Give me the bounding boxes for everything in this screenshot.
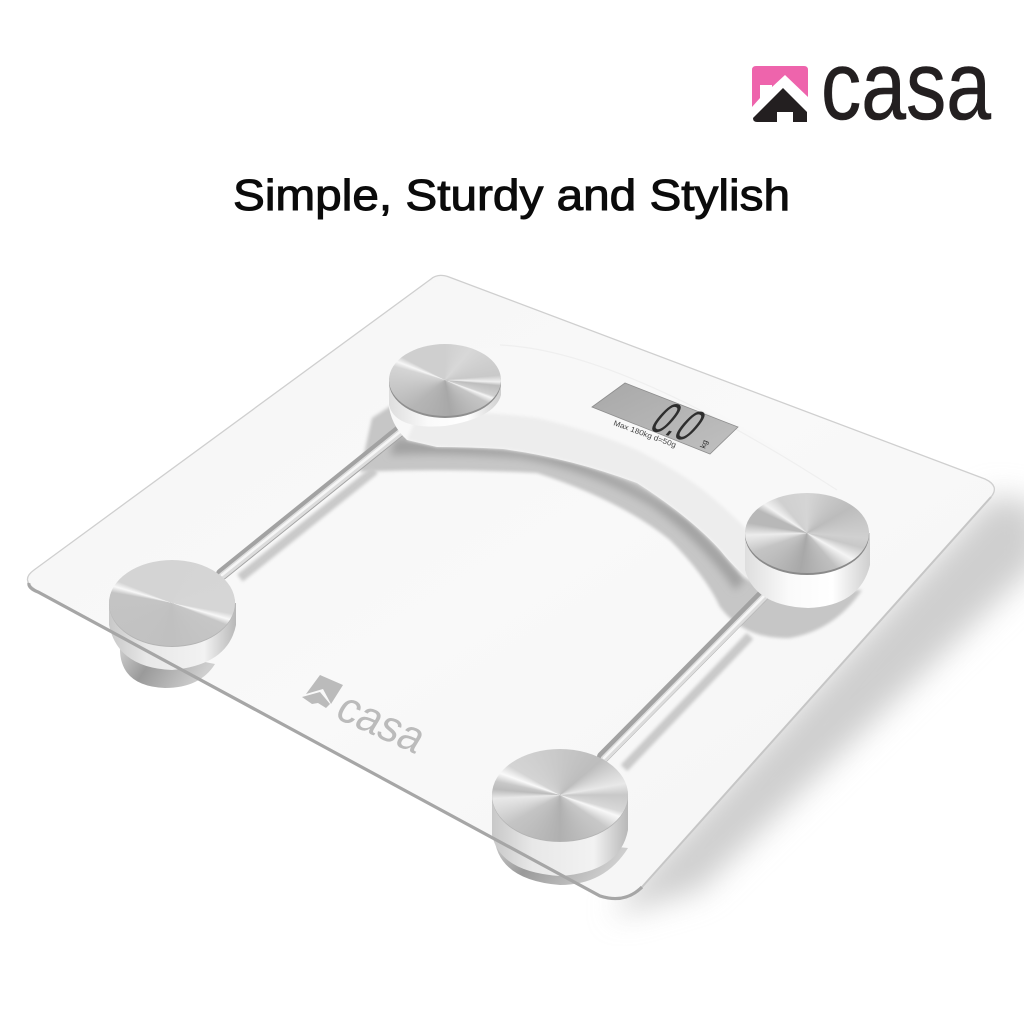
printed casa logo on glass: [302, 675, 436, 762]
LCD screen: [592, 383, 738, 454]
capacity label: Max 180kg d=50g: [612, 418, 677, 449]
title: Simple, Sturdy and Stylish: [233, 171, 790, 220]
glass platform: [27, 275, 994, 898]
printed logo icon: [302, 675, 343, 708]
rod shadows: [240, 470, 750, 768]
housing front face: [407, 412, 760, 587]
foot: right: [745, 493, 870, 608]
LCD display: [592, 383, 738, 454]
brand logo: [752, 31, 991, 140]
steel rods: [222, 421, 777, 759]
under-arch shadow: [360, 405, 862, 638]
cast shadow behind the scale: [615, 495, 1024, 915]
foot: top left: [389, 344, 501, 427]
printed logo wordmark: casa: [328, 683, 436, 762]
white arched display housing: [388, 345, 840, 590]
logo wordmark: casa: [821, 31, 991, 140]
logo icon: pink square with house: [752, 66, 808, 122]
housing top face: [388, 348, 840, 590]
foot: bottom: [492, 749, 628, 876]
lower foot bases seen through glass: [120, 645, 628, 885]
bathroom scale product illustration: [27, 275, 994, 899]
LCD reading: 0.0: [640, 394, 717, 450]
foot: left: [109, 560, 236, 670]
glass front edge: [29, 497, 991, 899]
LCD unit: kg: [698, 439, 710, 450]
